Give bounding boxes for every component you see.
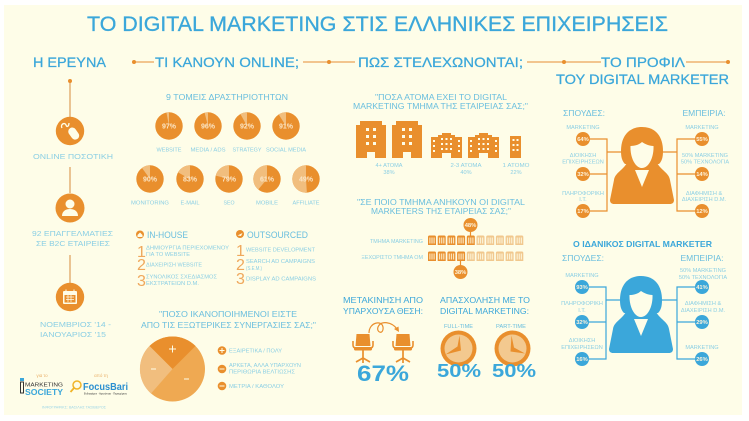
stat: employment type bbox=[437, 295, 536, 381]
panel: ideal digital marketer: 41% bbox=[696, 285, 708, 291]
logos bbox=[20, 372, 128, 410]
pie: media ads 96%: MEDIA / ADS bbox=[190, 148, 226, 154]
panel: ideal digital marketer: 26% bbox=[696, 357, 708, 363]
section heading: Το προφίλ του digital marketer: ΤΟΥ DIGITAL MARKETER bbox=[556, 71, 729, 87]
panel: ideal digital marketer: 50% MARKETING bbox=[680, 268, 726, 274]
panel: in-house list bbox=[136, 230, 229, 290]
panel: digital marketer profile: ΔΙΟΙΚΗΣΗ bbox=[570, 153, 596, 159]
pie: seo 79%: SEO bbox=[224, 200, 235, 206]
stat: employment type: FULL-TIME bbox=[444, 324, 473, 330]
icon: in-house bbox=[136, 230, 144, 238]
icon: chairs with arrow bbox=[353, 323, 413, 363]
logos: για το bbox=[36, 373, 48, 378]
pie: monitoring 90% bbox=[131, 165, 169, 206]
panel: digital marketer profile: 50% ΤΕΧΝΟΛΟΓΙΑ bbox=[681, 160, 729, 166]
legend: satisfaction: ΑΡΚΕΤΑ, ΑΛΛΑ ΥΠΑΡΧΟΥΝ bbox=[229, 363, 301, 369]
logo: iMarketing Society bbox=[20, 378, 64, 397]
panel: digital marketer profile: MARKETING bbox=[685, 125, 719, 131]
panel: outsourced list: DISPLAY AD CAMPAIGNS bbox=[246, 276, 316, 282]
stat: job mobility 67%: ΜΕΤΑΚΙΝΗΣΗ ΑΠΟ bbox=[343, 295, 423, 305]
icon: orange person bbox=[610, 127, 674, 204]
quote: team size bbox=[353, 93, 528, 111]
panel: in-house list: ΕΚΣΤΡΑΤΕΙΩΝ D.M. bbox=[146, 281, 199, 287]
pictogram chart: department: 38% bbox=[455, 270, 466, 276]
pie: seo 79% bbox=[215, 165, 243, 206]
pie: strategy 92% bbox=[232, 112, 262, 154]
logo: iMarketing Society: SOCIETY bbox=[25, 387, 63, 397]
pie: affiliate 49%: 49% bbox=[299, 176, 314, 184]
buildings chart: team size: 1 ΑΤΟΜΟ bbox=[502, 163, 530, 169]
stat: employment type: 50% bbox=[437, 361, 481, 381]
panel: ideal digital marketer: Ι.Τ. bbox=[578, 308, 586, 314]
panel: digital marketer profile: 50% MARKETING bbox=[682, 153, 728, 159]
pie: website 97%: WEBSITE bbox=[156, 148, 182, 154]
panel: ideal digital marketer: 50% ΤΕΧΝΟΛΟΓΙΑ bbox=[679, 275, 727, 281]
quote: satisfaction question bbox=[141, 310, 316, 330]
panel: ideal digital marketer: 93% bbox=[576, 285, 588, 291]
icon: mouse bbox=[56, 117, 84, 145]
pie: mobile 61%: MOBILE bbox=[256, 200, 278, 206]
pictogram chart: department: ΞΕΧΩΡΙΣΤΟ ΤΜΗΜΑ ΟΜ bbox=[361, 255, 423, 261]
pie: website 97% bbox=[155, 112, 183, 154]
panel: ideal digital marketer: ΕΜΠΕΙΡΙΑ: bbox=[680, 254, 724, 263]
panel: digital marketer profile: 32% bbox=[577, 172, 589, 178]
pie: e-mail 83% bbox=[176, 165, 204, 206]
panel: outsourced list: OUTSOURCED bbox=[247, 230, 308, 240]
panel: digital marketer profile: ΔΙΑΦΗΜΙΣΗ & bbox=[686, 191, 722, 197]
panel: digital marketer profile: 17% bbox=[577, 209, 589, 215]
panel: in-house list: ΣΥΝΟΛΙΚΟΣ ΣΧΕΔΙΑΣΜΟΣ bbox=[146, 274, 218, 280]
panel: ideal digital marketer: ΠΛΗΡΟΦΟΡΙΚΗ bbox=[561, 301, 603, 307]
timeline connector across headings bbox=[132, 60, 730, 64]
quote: satisfaction question: ΑΠΟ ΤΙΣ ΕΞΩΤΕΡΙΚΕΣ ΣΥΝΕΡΓΑΣΙΕΣ ΣΑΣ;" bbox=[141, 321, 316, 330]
stat: job mobility 67% bbox=[343, 295, 423, 386]
logos: από τη bbox=[94, 372, 108, 378]
quote: department: MARKETERS ΤΗΣ ΕΤΑΙΡΕΙΑΣ ΣΑΣ;" bbox=[371, 207, 511, 216]
label: dates: ΙΑΝΟΥΑΡΙΟΣ '15 bbox=[40, 330, 106, 339]
panel: ideal digital marketer: ΕΠΙΧΕΙΡΗΣΕΩΝ bbox=[561, 345, 603, 351]
panel: digital marketer profile: ΠΛΗΡΟΦΟΡΙΚΗ bbox=[562, 191, 604, 197]
buildings chart: team size: 22% bbox=[510, 170, 522, 176]
panel: digital marketer profile: ΣΠΟΥΔΕΣ: bbox=[563, 109, 605, 118]
buildings chart: team size bbox=[356, 121, 530, 176]
panel: outsourced list: 1 bbox=[236, 243, 245, 260]
logo: FocusBari: FocusBari bbox=[83, 382, 128, 393]
stat: employment type: ΑΠΑΣΧΟΛΗΣΗ ΜΕ ΤΟ bbox=[440, 295, 530, 305]
panel: in-house list: IN-HOUSE bbox=[147, 230, 188, 240]
panel: in-house list: 2 bbox=[137, 257, 146, 274]
pie: mobile 61% bbox=[253, 165, 281, 206]
quote: team size: MARKETING ΤΜΗΜΑ ΤΗΣ ΕΤΑΙΡΕΙΑΣ ΣΑΣ;" bbox=[353, 102, 528, 111]
panel: outsourced list: SEARCH AD CAMPAIGNS bbox=[246, 259, 315, 265]
panel: digital marketer profile: 64% bbox=[577, 137, 589, 143]
panel: in-house list: 3 bbox=[137, 273, 146, 290]
stat: employment type: DIGITAL MARKETING: bbox=[440, 306, 529, 316]
pie: affiliate 49% bbox=[292, 165, 320, 206]
pie: monitoring 90%: 90% bbox=[143, 176, 158, 184]
panel: ideal digital marketer: 32% bbox=[576, 320, 588, 326]
icon: blue person bbox=[609, 276, 673, 353]
panel: digital marketer profile bbox=[562, 109, 729, 218]
icon: clock part-time bbox=[494, 330, 530, 366]
pie: e-mail 83%: 83% bbox=[183, 176, 198, 184]
section heading: Πώς στελεχώνονται: ΠΩΣ ΣΤΕΛΕΧΩΝΟΝΤΑΙ; bbox=[358, 54, 523, 70]
legend: satisfaction bbox=[218, 346, 301, 390]
buildings chart: team size: 40% bbox=[460, 170, 472, 176]
pie: social media 91%: 91% bbox=[279, 124, 294, 130]
panel: digital marketer profile: Ι.Τ. bbox=[579, 197, 587, 203]
panel: outsourced list: 3 bbox=[236, 271, 245, 288]
quote: team size: "ΠΟΣΑ ΑΤΟΜΑ ΕΧΕΙ ΤΟ DIGITAL bbox=[375, 93, 508, 102]
pictogram chart: department: 48% bbox=[465, 223, 476, 229]
icon: user bbox=[56, 194, 84, 222]
pie: website 97%: 97% bbox=[162, 124, 177, 130]
pie: strategy 92%: 92% bbox=[240, 124, 255, 130]
section heading: Το προφίλ του digital marketer: ΤΟ ΠΡΟΦΙΛ bbox=[601, 54, 686, 70]
label: 92 professionals bbox=[32, 229, 113, 248]
panel: digital marketer profile: MARKETING bbox=[566, 125, 600, 131]
buildings chart: team size: 4+ ΑΤΟΜΑ bbox=[376, 163, 403, 169]
buildings chart: team size: 38% bbox=[383, 170, 395, 176]
panel: digital marketer profile: ΕΜΠΕΙΡΙΑ: bbox=[682, 109, 726, 118]
pie chart: satisfaction bbox=[140, 336, 205, 402]
pie: e-mail 83%: E-MAIL bbox=[180, 200, 200, 206]
panel: ideal digital marketer: MARKETING bbox=[685, 345, 719, 351]
pie: social media 91% bbox=[266, 112, 306, 154]
panel: digital marketer profile: 14% bbox=[696, 172, 708, 178]
label: 92 professionals: ΣΕ B2C ΕΤΑΙΡΕΙΕΣ bbox=[36, 239, 110, 248]
panel: ideal digital marketer: ΔΙΑΧΕΙΡΙΣΗ D.M. bbox=[681, 308, 726, 314]
stat: employment type: PART-TIME bbox=[496, 324, 526, 330]
label: dates: ΝΟΕΜΒΡΙΟΣ '14 - bbox=[40, 320, 112, 329]
stat: employment type: 50% bbox=[492, 361, 536, 381]
panel: ideal digital marketer: ΔΙΟΙΚΗΣΗ bbox=[569, 338, 595, 344]
panel: in-house list: ΓΙΑ ΤΟ WEBSITE bbox=[146, 252, 190, 258]
pie charts: activity sectors bbox=[131, 112, 320, 206]
quote: department bbox=[357, 198, 526, 216]
panel: outsourced list: (S.E.M.) bbox=[246, 266, 262, 272]
panel: in-house list: ΔΗΜΙΟΥΡΓΙΑ ΠΕΡΙΕΧΟΜΕΝΟΥ bbox=[146, 246, 229, 252]
pictogram chart: department bbox=[361, 218, 523, 279]
section heading: Τι κάνουν online: ΤΙ ΚΑΝΟΥΝ ONLINE; bbox=[155, 54, 299, 70]
panel: ideal digital marketer: ΣΠΟΥΔΕΣ: bbox=[562, 254, 604, 263]
pie: affiliate 49%: AFFILIATE bbox=[292, 200, 320, 206]
icon: clock full-time bbox=[440, 330, 476, 366]
heading: 9 sectors: 9 ΤΟΜΕΙΣ ΔΡΑΣΤΗΡΙΟΤΗΤΩΝ bbox=[166, 93, 288, 102]
panel: ideal digital marketer: Ο ΙΔΑΝΙΚΟΣ DIGITAL MARKETER bbox=[573, 239, 712, 249]
label: online quantitative: ONLINE ΠΟΣΟΤΙΚΗ bbox=[33, 152, 113, 161]
panel: ideal digital marketer: ΔΙΑΦΗΜΙΣΗ & bbox=[685, 301, 721, 307]
legend: satisfaction: ΕΞΑΙΡΕΤΙΚΑ / ΠΟΛΥ bbox=[229, 348, 282, 354]
logo: FocusBari: Ενδιαφέρον · Αμεσότητα · Περιεχόμενο bbox=[84, 392, 127, 396]
logo: iMarketing Society: MARKETING bbox=[25, 382, 64, 388]
quote: department: "ΣΕ ΠΟΙΟ ΤΜΗΜΑ ΑΝΗΚΟΥΝ ΟΙ DIGITAL bbox=[357, 198, 526, 207]
pie: monitoring 90%: MONITORING bbox=[131, 200, 169, 206]
panel: outsourced list: WEBSITE DEVELOPMENT bbox=[246, 248, 316, 254]
panel: in-house list: ΔΙΑΧΕΙΡΙΣΗ WEBSITE bbox=[146, 262, 202, 268]
panel: digital marketer profile: ΔΙΑΧΕΙΡΙΣΗ D.M. bbox=[682, 197, 727, 203]
panel: ideal digital marketer bbox=[561, 239, 727, 366]
quote: satisfaction question: "ΠΟΣΟ ΙΚΑΝΟΠΟΙΗΜΕΝΟΙ ΕΙΣΤΕ bbox=[159, 310, 297, 319]
panel: digital marketer profile: 55% bbox=[696, 137, 708, 143]
legend: satisfaction: ΠΕΡΙΘΩΡΙΑ ΒΕΛΤΙΩΣΗΣ bbox=[229, 370, 296, 376]
panel: ideal digital marketer: MARKETING bbox=[565, 273, 599, 279]
panel: outsourced list bbox=[236, 230, 316, 288]
panel: outsourced list: 2 bbox=[236, 257, 245, 274]
pie: media ads 96% bbox=[190, 112, 226, 154]
stat: job mobility 67%: ΥΠΑΡΧΟΥΣΑ ΘΕΣΗ: bbox=[343, 306, 423, 316]
panel: ideal digital marketer: 29% bbox=[696, 320, 708, 326]
section heading: Το προφίλ του digital marketer bbox=[556, 54, 729, 87]
icon: calendar bbox=[56, 283, 84, 311]
pie: mobile 61%: 61% bbox=[260, 176, 275, 184]
stat: job mobility 67%: 67% bbox=[357, 361, 409, 386]
title: ΤΟ DIGITAL MARKETING ΣΤΙΣ ΕΛΛΗΝΙΚΕΣ ΕΠΙΧΕΙΡΗΣΕΙΣ bbox=[87, 13, 668, 36]
section heading: Η έρευνα: Η ΕΡΕΥΝΑ bbox=[33, 54, 107, 70]
panel: digital marketer profile: 12% bbox=[696, 209, 708, 215]
pie: strategy 92%: STRATEGY bbox=[232, 148, 262, 154]
icon: outsourced bbox=[236, 230, 244, 238]
logo: FocusBari bbox=[70, 381, 128, 396]
panel: in-house list: 1 bbox=[137, 244, 146, 261]
pie: social media 91%: SOCIAL MEDIA bbox=[266, 148, 306, 154]
panel: digital marketer profile: ΕΠΙΧΕΙΡΗΣΕΩΝ bbox=[562, 160, 604, 166]
pie: seo 79%: 79% bbox=[222, 176, 237, 184]
panel: ideal digital marketer: 16% bbox=[576, 357, 588, 363]
buildings chart: team size: 2-3 ΑΤΟΜΑ bbox=[450, 163, 482, 169]
legend: satisfaction: ΜΕΤΡΙΑ / ΚΑΘΟΛΟΥ bbox=[229, 384, 284, 390]
column: research timeline bbox=[32, 79, 113, 339]
label: 92 professionals: 92 ΕΠΑΓΓΕΛΜΑΤΙΕΣ bbox=[32, 229, 113, 238]
pictogram chart: department: ΤΜΗΜΑ MARKETING bbox=[370, 239, 423, 245]
label: dates bbox=[40, 320, 112, 339]
pie: media ads 96%: 96% bbox=[201, 124, 216, 130]
credit: ΙΝΦΟΓΡΑΦΙΚΣ: ΒΑΣΙΛΗΣ ΤΑΣΙΒΕΡΟΣ bbox=[42, 406, 106, 410]
